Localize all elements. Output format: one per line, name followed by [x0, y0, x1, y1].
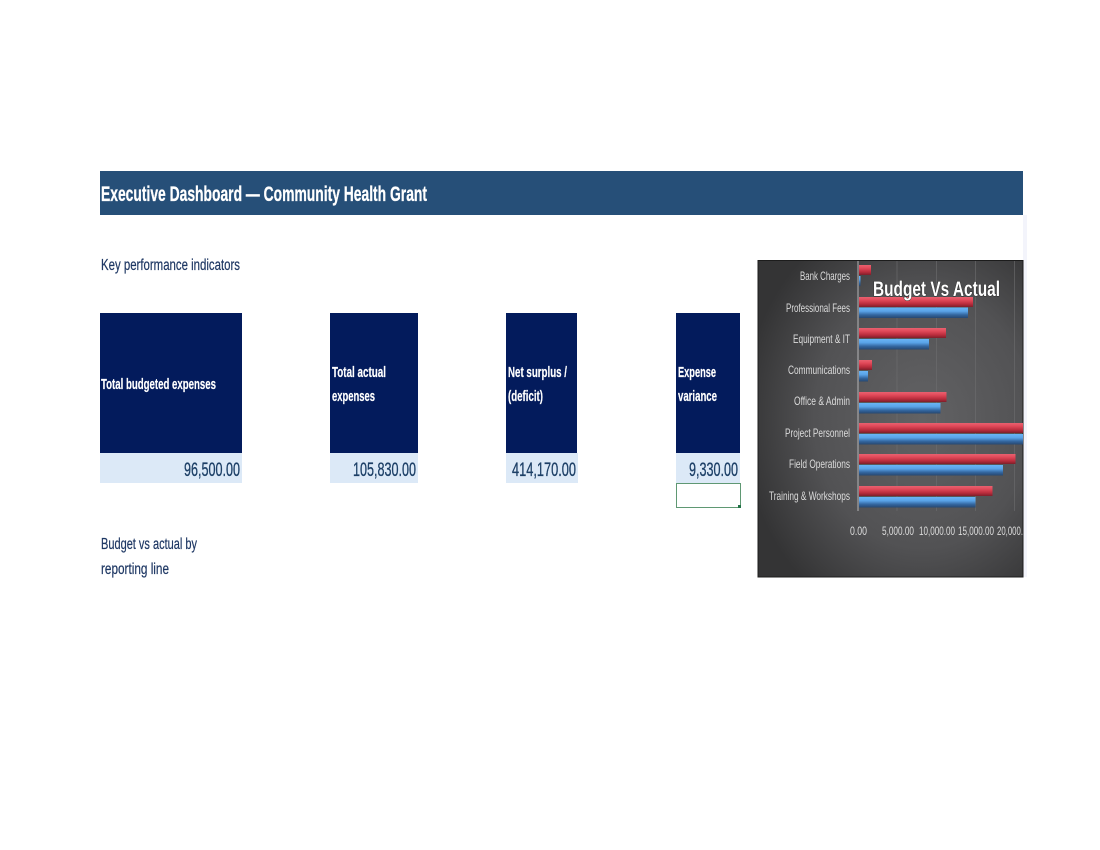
title banner: [100, 171, 1023, 215]
category labels: Project Personnel: [785, 426, 850, 440]
category labels: Training & Workshops: [769, 489, 850, 503]
value axis labels: 10,000.00: [919, 524, 955, 538]
KPI card: net surplus or deficit: [506, 313, 578, 483]
KPI card: net surplus or deficit: Net surplus /: [508, 365, 567, 381]
KPI card: expense variance: 9,330.00: [689, 460, 738, 481]
KPI card: total actual expenses: 105,830.00: [353, 460, 416, 481]
value axis labels: 0.00: [850, 524, 867, 538]
heading: budget vs actual by reporting line: [101, 536, 197, 578]
KPI card: expense variance: variance: [678, 389, 717, 405]
KPI card: total budgeted expenses: 96,500.00: [184, 460, 240, 481]
KPI card: net surplus or deficit: (deficit): [508, 389, 543, 405]
category labels: Bank Charges: [800, 269, 850, 283]
heading: key performance indicators: Key performance indicators: [101, 257, 240, 274]
KPI card: expense variance: Expense: [678, 365, 716, 381]
category labels: Communications: [788, 363, 850, 377]
category labels: Office & Admin: [794, 394, 850, 408]
heading: budget vs actual by reporting line: reporting line: [101, 561, 169, 578]
selected empty cell: [676, 484, 741, 508]
value axis labels: 15,000.00: [958, 524, 994, 538]
actual bars (blue): [859, 276, 1023, 508]
category labels: Equipment & IT: [793, 332, 850, 346]
KPI card: total actual expenses: Total actual: [332, 365, 386, 381]
category labels: Professional Fees: [786, 301, 850, 315]
category labels: [769, 269, 850, 503]
heading: budget vs actual by reporting line: Budget vs actual by: [101, 536, 197, 553]
budget bars (red): [859, 265, 1023, 496]
value axis labels: [850, 524, 1023, 538]
KPI card: total budgeted expenses: [100, 313, 242, 483]
KPI card: expense variance: [676, 313, 740, 483]
value axis labels: 5,000.00: [882, 524, 914, 538]
value axis labels: 20,000.: [997, 524, 1023, 538]
KPI card: total actual expenses: expenses: [332, 389, 375, 405]
category labels: Field Operations: [789, 457, 850, 471]
chart title: Budget Vs Actual: [873, 278, 1000, 301]
KPI card: total actual expenses: [330, 313, 418, 483]
KPI card: net surplus or deficit: 414,170.00: [512, 460, 576, 481]
title banner: Executive Dashboard — Community Health Grant: [101, 183, 427, 206]
KPI card: total budgeted expenses: Total budgeted expenses: [101, 377, 216, 393]
bar chart: budget vs actual: [758, 260, 1023, 577]
